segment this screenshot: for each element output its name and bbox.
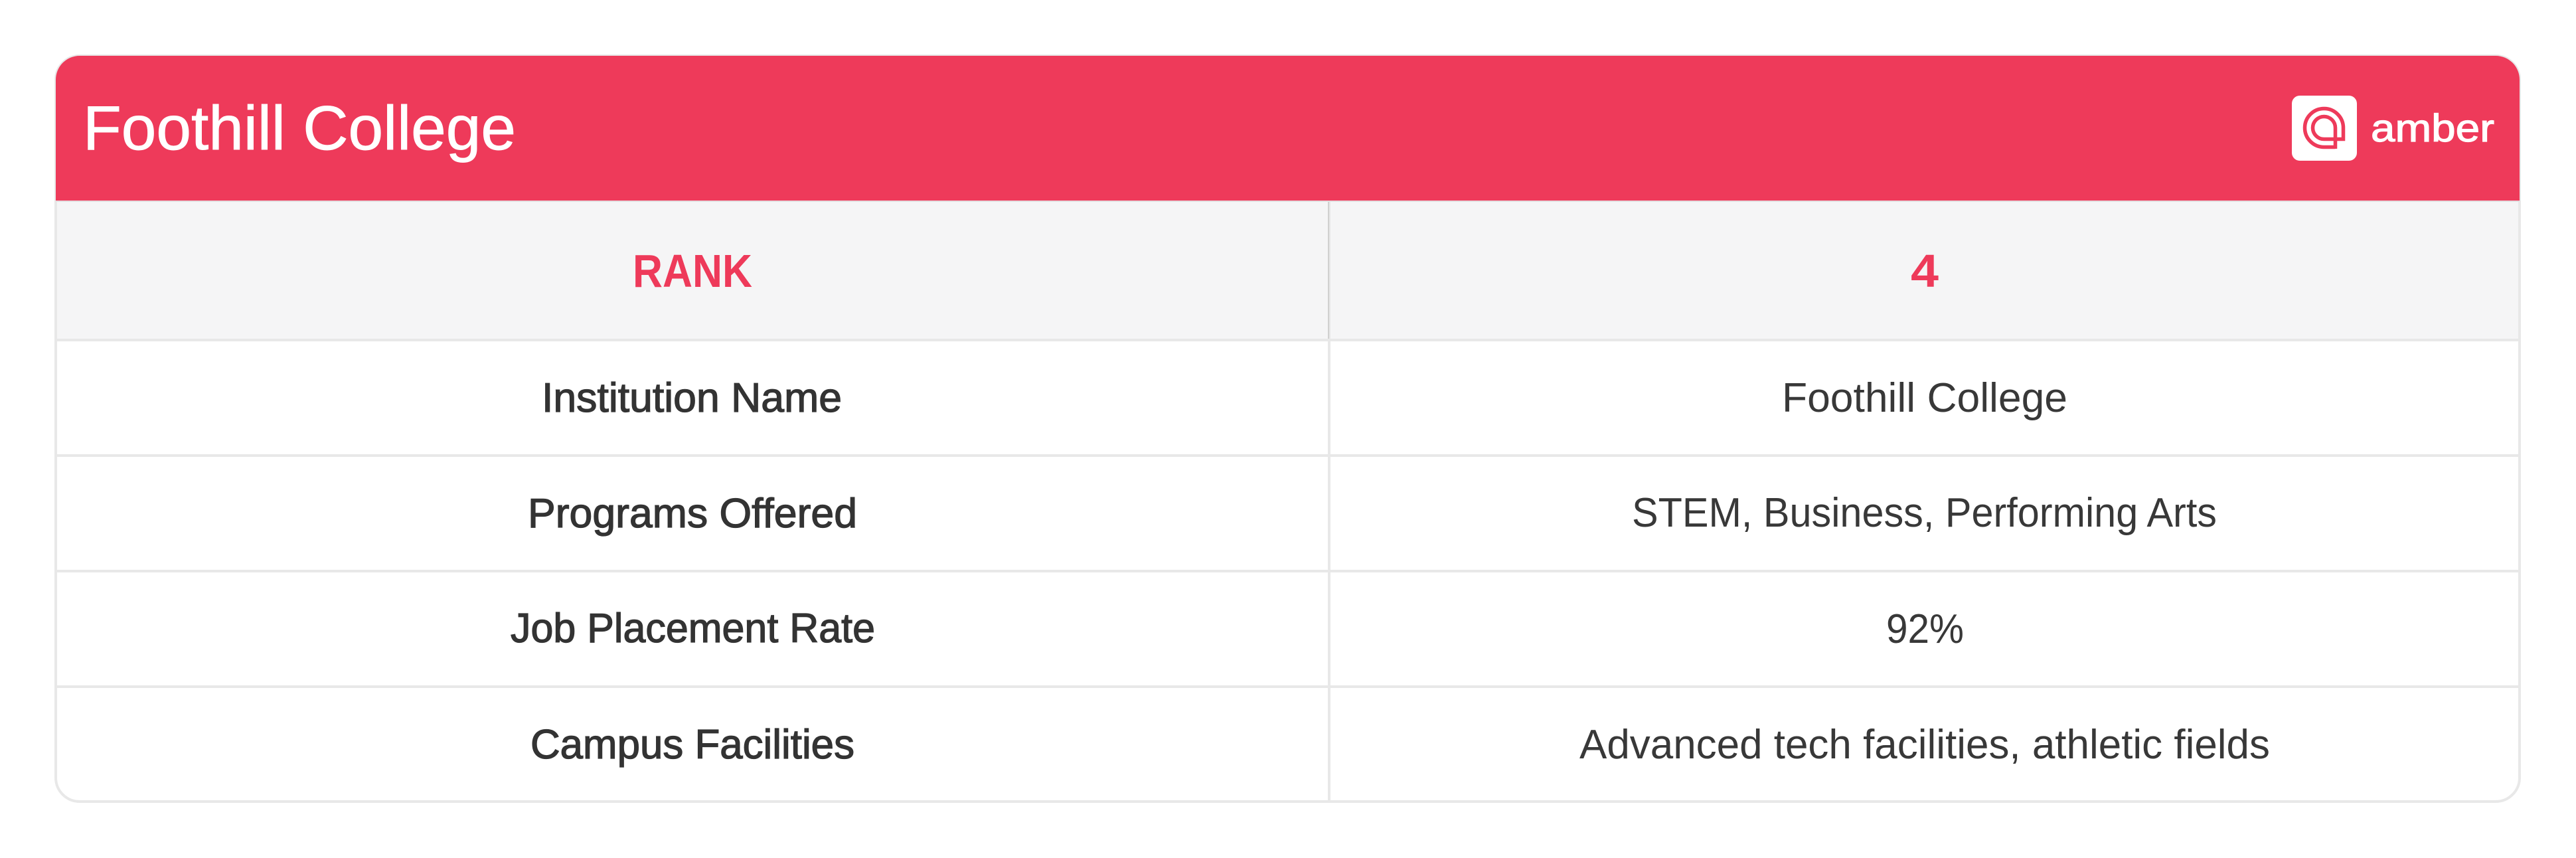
programs label: Programs Offered [528, 491, 857, 537]
rank label: RANK [633, 245, 752, 297]
campus facilities value: Advanced tech facilities, athletic fields [1579, 722, 2270, 768]
institution value: Foothill College [1782, 375, 2067, 421]
row: job placement rate [511, 606, 1964, 652]
amber logo [2292, 96, 2494, 161]
campus facilities label: Campus Facilities [530, 722, 854, 768]
row: programs offered [528, 490, 2217, 537]
logo wordmark: amber [2371, 107, 2494, 150]
row: campus facilities [530, 722, 2270, 768]
job placement value: 92% [1886, 606, 1964, 652]
institution label: Institution Name [542, 375, 842, 421]
rank row background [57, 201, 2518, 339]
job placement label: Job Placement Rate [511, 606, 875, 651]
row: rank [633, 245, 1939, 297]
rank value: 4 [1911, 245, 1939, 297]
title: Foothill College [83, 93, 516, 163]
row: institution name [542, 375, 2067, 421]
icon: amber mark [2292, 96, 2357, 161]
programs value: STEM, Business, Performing Arts [1632, 490, 2217, 536]
header banner [56, 56, 2520, 202]
table grid lines [56, 201, 2520, 801]
